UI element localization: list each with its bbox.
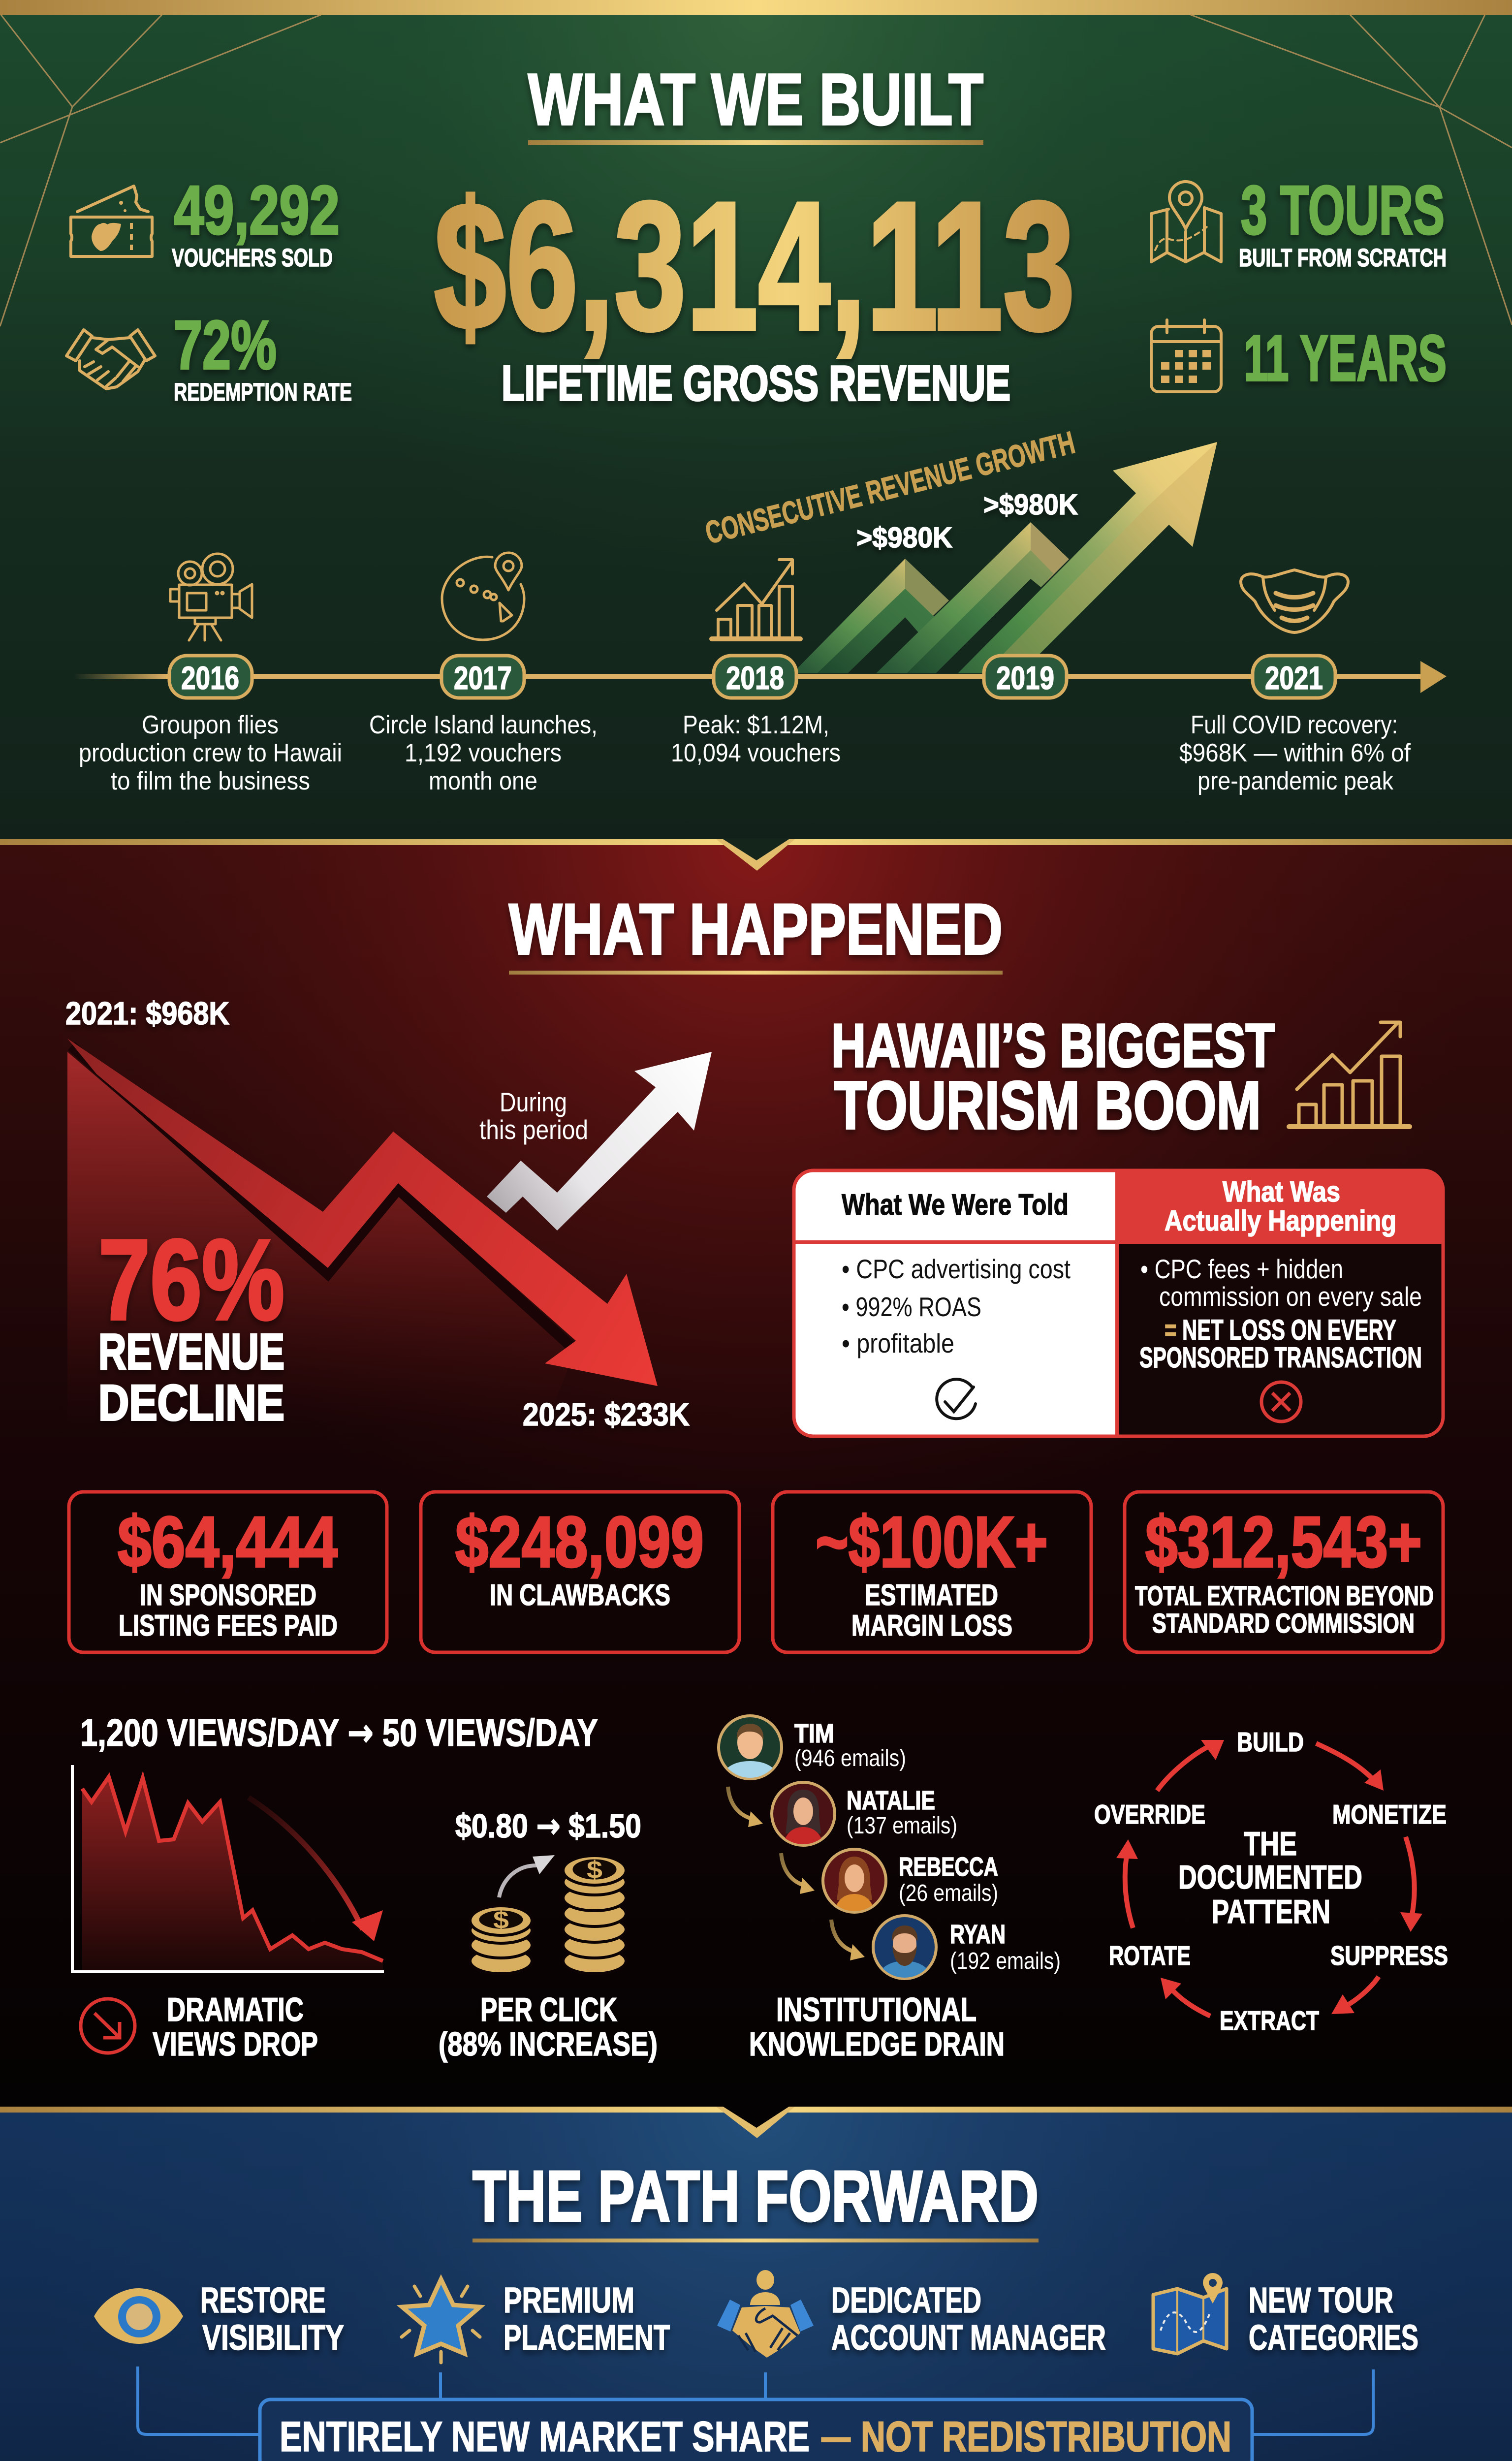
- label: dedicated account manager: DEDICATED: [831, 2281, 981, 2320]
- text: 2021 description: pre-pandemic peak: [1197, 767, 1394, 795]
- label: natalie emails: NATALIE: [847, 1786, 935, 1815]
- label: new tour categories: CATEGORIES: [1249, 2318, 1418, 2358]
- avatar: tim: [719, 1716, 782, 1782]
- top gold band: [0, 0, 1512, 15]
- icon: film camera: [170, 554, 252, 640]
- chart: revenue decline arrow: [67, 1039, 658, 1427]
- arrow: rebecca to ryan: [831, 1920, 865, 1960]
- icon: eye: [94, 2288, 183, 2344]
- label: cost per click change: $0.80 → $1.50: [455, 1807, 641, 1846]
- icon: short coin stack: [470, 1906, 532, 1974]
- list: what was actually happening: = NET LOSS ON EVERY: [1165, 1314, 1396, 1346]
- heading: the path forward: THE PATH FORWARD: [472, 2156, 1039, 2236]
- heading: hawaii's biggest tourism boom: HAWAII’S BIGGEST: [831, 1012, 1275, 1080]
- text: 2021 description: $968K — within 6% of: [1179, 739, 1411, 767]
- icon: calendar: [1151, 320, 1221, 392]
- card: sponsored listing fees: IN SPONSORED: [140, 1578, 316, 1611]
- label: rebecca emails: [899, 1852, 998, 1906]
- text: 2016 description: production crew to Hawaii: [79, 739, 342, 767]
- label: tim emails: (946 emails): [794, 1745, 906, 1771]
- timeline axis and arrow: [74, 661, 1447, 693]
- label: per click increase: PER CLICK: [480, 1991, 617, 2028]
- label: 2021 revenue: 2021: $968K: [65, 995, 229, 1031]
- pill: 2018: 2018: [726, 660, 784, 696]
- stat: three tours: [1239, 171, 1447, 272]
- card: total extraction: $312,543+: [1145, 1502, 1422, 1582]
- icon: bar chart growth: [712, 560, 800, 639]
- icon: star: [402, 2279, 480, 2363]
- section divider: red to blue: [0, 2106, 1512, 2138]
- list: what we were told: • CPC advertising cost: [842, 1254, 1071, 1284]
- label: during this period: [479, 1087, 588, 1145]
- stat: 76 percent revenue decline: [98, 1216, 284, 1431]
- cycle center title: PATTERN: [1212, 1893, 1330, 1930]
- list: what was actually happening: • CPC fees + hidden: [1140, 1254, 1343, 1284]
- label: first over 980k: >$980K: [856, 522, 952, 554]
- callout: entirely new market share: NOT REDISTRIBUTION: [861, 2413, 1231, 2461]
- icon: face mask: [1241, 570, 1348, 632]
- label: per click increase: [439, 1991, 658, 2063]
- label: per click increase: (88% INCREASE): [439, 2025, 658, 2063]
- label: natalie emails: (137 emails): [847, 1813, 957, 1839]
- card: total extraction: [1125, 1492, 1443, 1652]
- card: estimated margin loss: [773, 1492, 1091, 1652]
- corner geometric lines: [0, 15, 1512, 326]
- avatar: rebecca: [823, 1849, 886, 1915]
- list: what we were told: [842, 1254, 1071, 1358]
- stat: vouchers sold: VOUCHERS SOLD: [172, 244, 333, 272]
- list: what was actually happening: [1139, 1254, 1422, 1374]
- card: sponsored listing fees: $64,444: [118, 1502, 338, 1582]
- icon: ticket: [71, 186, 152, 256]
- card: estimated margin loss: ESTIMATED: [865, 1578, 998, 1611]
- label: rebecca emails: (26 emails): [899, 1880, 998, 1906]
- icon: tall coin stack: [563, 1856, 626, 1974]
- text: 2016 description: to film the business: [111, 767, 310, 795]
- text: 2017 description: Circle Island launches,: [369, 711, 598, 739]
- list: what was actually happening: commission on every sale: [1159, 1281, 1422, 1312]
- stat: redemption rate: 72%: [174, 306, 277, 383]
- stat: redemption rate: [174, 306, 352, 406]
- text: 2016 description: [79, 711, 342, 795]
- text: 2017 description: [369, 711, 598, 795]
- cycle stage labels: ROTATE: [1109, 1940, 1191, 1971]
- stat: 76 percent revenue decline: REVENUE: [98, 1324, 284, 1380]
- white arrow: tourism up: [487, 1052, 712, 1230]
- arrow: tim to natalie: [728, 1787, 763, 1827]
- section divider: green to red: [0, 838, 1512, 871]
- panel: the path forward: [0, 2106, 1512, 2461]
- text: 2021 description: [1179, 711, 1411, 795]
- heading: what we built: WHAT WE BUILT: [528, 59, 983, 140]
- pill: 2016: 2016: [181, 660, 239, 696]
- label: premium placement: PREMIUM: [504, 2281, 634, 2320]
- label: new tour categories: [1249, 2281, 1418, 2358]
- icon: short coin stack: $: [493, 1906, 509, 1934]
- avatar: ryan: [873, 1916, 936, 1981]
- icon: map and pin: [1151, 182, 1221, 262]
- heading underline: [509, 971, 1003, 975]
- cycle stage labels: SUPPRESS: [1330, 1940, 1448, 1971]
- label: institutional knowledge drain: [749, 1991, 1005, 2063]
- text: 2016 description: Groupon flies: [142, 711, 279, 739]
- arrow: natalie to rebecca: [781, 1853, 815, 1894]
- heading underline: [472, 2239, 1039, 2242]
- label: restore visibility: VISIBILITY: [202, 2318, 344, 2358]
- label: dramatic views drop: [153, 1991, 318, 2063]
- hero figure: lifetime revenue: $6,314,113: [434, 164, 1075, 368]
- chart: views per day drop: [72, 1765, 384, 1972]
- label: institutional knowledge drain: KNOWLEDGE DRAIN: [749, 2025, 1005, 2063]
- label: ryan emails: (192 emails): [950, 1948, 1061, 1974]
- comparison table: [792, 1169, 1445, 1438]
- panel: what happened: [0, 838, 1512, 2107]
- card: estimated margin loss: ~$100K+: [816, 1502, 1048, 1582]
- icon: gray rising arrow: [499, 1855, 555, 1897]
- column header: what was actually happening: [1165, 1176, 1396, 1237]
- label: tim emails: TIM: [794, 1719, 834, 1748]
- label: restore visibility: [200, 2281, 344, 2358]
- panel: what we built: [0, 0, 1512, 845]
- icon: dedicated manager handshake: [717, 2270, 814, 2358]
- text: 2018 description: Peak: $1.12M,: [683, 711, 829, 739]
- pill: 2021: 2021: [1265, 660, 1323, 696]
- label: institutional knowledge drain: INSTITUTIONAL: [776, 1991, 976, 2028]
- icon: hawaii globe: [442, 553, 524, 640]
- card: estimated margin loss: MARGIN LOSS: [851, 1609, 1012, 1642]
- stat: 76 percent revenue decline: DECLINE: [98, 1375, 284, 1431]
- cycle arrows: [1116, 1740, 1422, 2016]
- card: clawbacks: IN CLAWBACKS: [490, 1578, 670, 1611]
- label: dedicated account manager: [831, 2281, 1106, 2358]
- icon: handshake: [66, 330, 155, 389]
- connector lines: [138, 2366, 1373, 2434]
- card: clawbacks: [421, 1492, 739, 1652]
- callout: entirely new market share: —: [821, 2413, 850, 2461]
- column header: what was actually happening: Actually Happening: [1165, 1205, 1396, 1237]
- text: 2018 description: 10,094 vouchers: [671, 739, 841, 767]
- hero figure: lifetime revenue: LIFETIME GROSS REVENUE: [502, 356, 1010, 411]
- label: views per day: 1,200 VIEWS/DAY → 50 VIEWS/DAY: [80, 1711, 598, 1755]
- callout: entirely new market share: ENTIRELY NEW MARKET SHARE: [280, 2413, 810, 2461]
- card: sponsored listing fees: [69, 1492, 387, 1652]
- text: 2017 description: month one: [429, 767, 537, 795]
- label: during this period: During: [500, 1087, 567, 1117]
- label: dramatic views drop: DRAMATIC: [167, 1991, 304, 2028]
- text: 2017 description: 1,192 vouchers: [405, 739, 562, 767]
- column header: what we were told: What We Were Told: [842, 1188, 1069, 1221]
- list: what we were told: • 992% ROAS: [842, 1292, 981, 1322]
- label: tim emails: [794, 1719, 906, 1771]
- pill: 2019: 2019: [996, 660, 1054, 696]
- label: ryan emails: [950, 1920, 1061, 1974]
- icon: dramatic drop circle: [81, 1999, 135, 2053]
- label: consecutive revenue growth: CONSECUTIVE REVENUE GROWTH: [702, 424, 1078, 551]
- cycle stage labels: EXTRACT: [1220, 2005, 1319, 2036]
- cycle center title: THE: [1244, 1825, 1297, 1862]
- timeline pills: [169, 656, 1335, 698]
- icon: new tour map: [1153, 2273, 1227, 2354]
- cycle stage labels: [1094, 1727, 1448, 2036]
- heading: what happened: WHAT HAPPENED: [509, 889, 1003, 969]
- label: 2025 revenue: 2025: $233K: [523, 1396, 690, 1432]
- callout: entirely new market share: [260, 2399, 1252, 2461]
- card: clawbacks: $248,099: [455, 1502, 704, 1582]
- card: total extraction: STANDARD COMMISSION: [1152, 1608, 1415, 1639]
- column header: what was actually happening: What Was: [1223, 1176, 1340, 1208]
- cycle stage labels: MONETIZE: [1332, 1799, 1447, 1830]
- card: sponsored listing fees: LISTING FEES PAID: [119, 1609, 338, 1642]
- heading underline: [528, 140, 983, 145]
- label: dramatic views drop: VIEWS DROP: [153, 2025, 318, 2063]
- label: during this period: this period: [479, 1114, 588, 1145]
- text: 2021 description: Full COVID recovery:: [1191, 711, 1398, 739]
- label: restore visibility: RESTORE: [200, 2281, 326, 2320]
- diagram: the documented pattern cycle: [1094, 1727, 1448, 2036]
- label: second over 980k: >$980K: [983, 489, 1078, 521]
- label: dedicated account manager: ACCOUNT MANAGER: [831, 2318, 1106, 2358]
- cycle center title: [1178, 1825, 1362, 1930]
- label: premium placement: [504, 2281, 670, 2358]
- cycle center title: DOCUMENTED: [1178, 1859, 1362, 1896]
- cycle stage labels: BUILD: [1237, 1727, 1304, 1757]
- growth arrow: consecutive revenue growth: [792, 442, 1217, 673]
- icon: x mark: [1261, 1382, 1301, 1421]
- list: what we were told: • profitable: [842, 1328, 954, 1358]
- heading: hawaii's biggest tourism boom: TOURISM BOOM: [834, 1068, 1261, 1143]
- pill: 2017: 2017: [454, 660, 512, 696]
- cycle stage labels: OVERRIDE: [1094, 1799, 1205, 1830]
- stat: vouchers sold: 49,292: [174, 171, 340, 249]
- heading: hawaii's biggest tourism boom: [831, 1012, 1275, 1143]
- icon: check mark: [937, 1379, 976, 1419]
- label: natalie emails: [847, 1786, 957, 1839]
- label: rebecca emails: REBECCA: [899, 1852, 998, 1882]
- text: 2018 description: [671, 711, 841, 767]
- icon: tall coin stack: $: [587, 1856, 602, 1884]
- label: new tour categories: NEW TOUR: [1249, 2281, 1393, 2320]
- stat: three tours: BUILT FROM SCRATCH: [1239, 244, 1447, 272]
- label: ryan emails: RYAN: [950, 1920, 1006, 1949]
- stat: redemption rate: REDEMPTION RATE: [174, 378, 352, 406]
- avatar: natalie: [772, 1782, 835, 1848]
- label: premium placement: PLACEMENT: [504, 2318, 670, 2358]
- stat: 76 percent revenue decline: 76%: [98, 1216, 284, 1344]
- icon: gold growth chart: [1289, 1022, 1410, 1127]
- hero figure: lifetime revenue: [434, 164, 1075, 411]
- stat: vouchers sold: [172, 171, 340, 272]
